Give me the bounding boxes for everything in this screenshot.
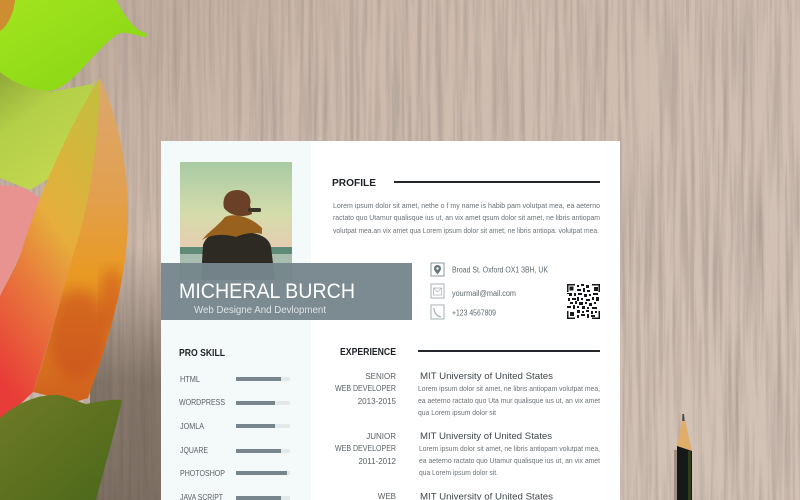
experience entry 2: MIT University of United States [420, 431, 552, 441]
job title: Web Designe And Devlopment [194, 304, 326, 316]
experience entry 1: qua Lorem ipsum dolor sit [418, 408, 496, 417]
experience entry 2: ea aeterno ractato quo Utamur qualisque ius ut, an vix amet [419, 456, 600, 465]
skill: WordPress: WORDPRESS [179, 398, 225, 407]
skill: Jquare: JQUARE [180, 446, 208, 455]
contact: phone [431, 305, 496, 319]
contact: email [431, 284, 516, 298]
skill: Jomla [180, 422, 290, 431]
icon: map pin [431, 263, 444, 276]
contact: address [431, 263, 549, 276]
profile text [333, 201, 600, 235]
skill: Jomla: JOMLA [180, 422, 205, 431]
contact: address: Broad St. Oxford OX1 3BH, UK [452, 266, 549, 274]
experience entry 1: 2013-2015 [358, 397, 397, 406]
experience entry 1: SENIOR [365, 372, 396, 381]
leaf: pink [0, 185, 44, 296]
pro skill heading: PRO SKILL [179, 348, 225, 359]
skill: HTML [180, 375, 290, 384]
profile text: volutpat mea.an vix amet qua Lorem ipsum dolor sit amet, ne libris antiopa. volutpat mea. [333, 226, 599, 235]
profile heading: PROFILE [332, 178, 376, 189]
QR code [567, 284, 600, 319]
skill: Photoshop [180, 469, 290, 478]
leaf: orange right half [33, 78, 128, 402]
experience entry 2: Lorem ipsum dolor sit amet, ne libris antiopam volutpat mea, [419, 444, 600, 453]
sidebar panel [161, 141, 311, 500]
experience entry 2: qua Lorem ipsum dolor sit. [419, 468, 498, 477]
pencil [674, 414, 692, 500]
name band [161, 263, 412, 320]
experience entry 2: 2011-2012 [358, 457, 397, 466]
experience entry 1: MIT University of United States [420, 371, 553, 381]
profile text: ractato quo Utamur qualisque ius ut, an vix amet qsum dolor sit amet, ne libris antiopam [333, 213, 600, 222]
leaf: dark green [0, 395, 122, 500]
leaf: yellow-red left half [0, 78, 100, 420]
experience entry 1: ea aeterno ractato quo Uta mur qualisque ius ut, an vix amet [418, 396, 600, 405]
contact: phone: +123 4567809 [452, 308, 496, 318]
portrait photo [180, 162, 292, 280]
skill: HTML: HTML [180, 375, 201, 384]
skill: Java Script [180, 493, 290, 500]
contact: email: yourmail@mail.com [452, 289, 516, 298]
experience entry 1: Lorem ipsum dolor sit amet, ne libris antiopam volutpat mea, [418, 384, 600, 393]
leaf: bright green [0, 0, 147, 91]
decorative leaves [0, 0, 147, 500]
experience entry 2 [335, 431, 600, 477]
experience entry 2: JUNIOR [366, 432, 396, 441]
experience entry 2: WEB DEVELOPER [335, 444, 396, 453]
profile text: Lorem ipsum dolor sit amet, nethe o f my name is habib pam volutpat mea, ea aeterno [333, 201, 600, 210]
skill: Jquare [180, 446, 290, 455]
name: MICHERAL BURCH [179, 280, 355, 303]
icon: telephone [431, 305, 444, 319]
experience entry 1: WEB DEVELOPER [335, 384, 396, 393]
leaf: brown corner [0, 0, 15, 31]
icon: envelope [431, 284, 444, 298]
experience heading: EXPERIENCE [340, 347, 396, 358]
leaf: pale green [0, 72, 95, 190]
sidebar: pro skill [179, 348, 290, 500]
experience entry 1 [335, 371, 600, 417]
skill: WordPress [179, 398, 290, 407]
skill: Photoshop: PHOTOSHOP [180, 469, 225, 478]
sheet background [161, 141, 620, 500]
resume sheet [161, 141, 620, 500]
